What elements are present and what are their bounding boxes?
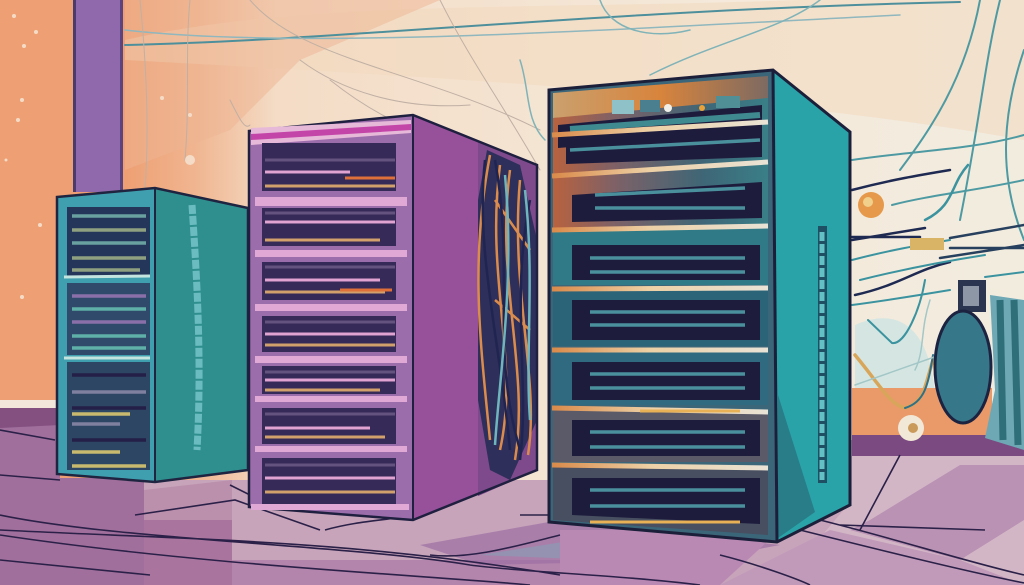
vent strip (818, 226, 827, 483)
cable bundle (478, 155, 531, 460)
server rack: left teal (57, 188, 248, 482)
rack units (262, 143, 396, 504)
wall fixture: orange socket (858, 192, 884, 218)
purple pillar (73, 0, 123, 192)
teal disc device (935, 280, 1024, 450)
wall fixture: gold bar (910, 238, 944, 250)
rack units (553, 76, 768, 118)
wall fixture: ivory socket (898, 415, 924, 441)
server rack: right teal (549, 70, 850, 542)
wall wires (125, 0, 1024, 408)
server rack: middle magenta (249, 115, 537, 520)
floor (0, 408, 1024, 585)
wall dots (4, 14, 195, 299)
